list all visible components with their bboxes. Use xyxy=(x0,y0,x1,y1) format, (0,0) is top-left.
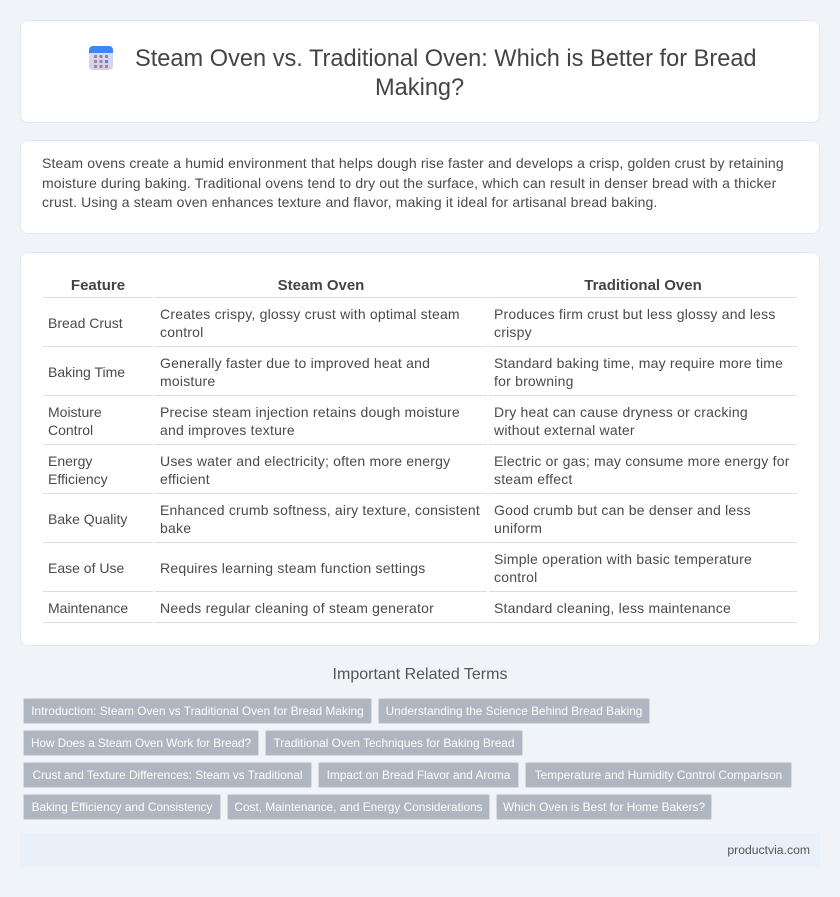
row: moisture control: without external water xyxy=(494,422,635,438)
title text: Making? xyxy=(375,75,464,101)
row: energy efficiency: Electric or gas; may consume more energy for xyxy=(494,453,790,469)
row: bake quality: Enhanced crumb softness, airy texture, consistent xyxy=(160,502,480,518)
table header: Feature xyxy=(71,277,125,294)
row: moisture control: and improves texture xyxy=(160,422,295,438)
row: bake quality: bake xyxy=(160,520,191,536)
row: ease of use: control xyxy=(494,569,538,585)
row: ease of use xyxy=(48,551,752,585)
row: energy efficiency: Energy xyxy=(48,453,92,469)
tag list: related terms: Impact on Bread Flavor and Aroma xyxy=(327,768,510,782)
panel: comparison table xyxy=(20,252,820,646)
row: moisture control: Control xyxy=(48,422,93,438)
tag list: related terms xyxy=(23,698,792,820)
row: bread crust: Produces firm crust but less glossy and less xyxy=(494,306,776,322)
row: moisture control xyxy=(48,404,748,438)
table header xyxy=(71,277,702,294)
row: bake quality: Good crumb but can be denser and less xyxy=(494,502,751,518)
row: moisture control: Moisture xyxy=(48,404,102,420)
row: baking time: Standard baking time, may require more time xyxy=(494,355,783,371)
footer bar xyxy=(20,833,820,867)
heading: important related terms: Important Related Terms xyxy=(333,666,507,683)
row: maintenance: Maintenance xyxy=(48,600,128,616)
title text: Steam Oven vs. Traditional Oven: Which is Better for Bread xyxy=(135,46,757,72)
tag list: related terms: Baking Efficiency and Consistency xyxy=(32,800,212,814)
row: maintenance: Standard cleaning, less maintenance xyxy=(494,600,731,616)
row: moisture control: Dry heat can cause dryness or cracking xyxy=(494,404,748,420)
panel: title xyxy=(20,20,820,123)
tag list: related terms: Cost, Maintenance, and Energy Considerations xyxy=(234,800,483,814)
icon: calendar grid xyxy=(89,46,113,70)
paragraph text: crust. Using a steam oven enhances texture and flavor, making it ideal for artisanal bread baking. xyxy=(42,194,657,210)
paragraph text: Steam ovens create a humid environment that helps dough rise faster and develops a crisp, golden crust by retaining xyxy=(42,155,784,171)
paragraph text xyxy=(42,155,784,210)
footer source text: productvia.com xyxy=(727,843,810,857)
tag list: related terms: Traditional Oven Techniques for Baking Bread xyxy=(274,736,514,750)
tag list: related terms: Which Oven is Best for Home Bakers? xyxy=(503,800,705,814)
row: bread crust: crispy xyxy=(494,324,532,340)
title text xyxy=(135,46,757,101)
panel: introduction paragraph xyxy=(20,140,820,234)
row: bake quality: Bake Quality xyxy=(48,511,127,527)
row: maintenance xyxy=(48,600,731,616)
row: bread crust: control xyxy=(160,324,204,340)
tag list: related terms: Introduction: Steam Oven vs Traditional Oven for Bread Making xyxy=(31,704,364,718)
row: energy efficiency: Uses water and electricity; often more energy xyxy=(160,453,450,469)
row: energy efficiency xyxy=(48,453,790,487)
table header: Traditional Oven xyxy=(584,277,702,294)
row: bread crust: Bread Crust xyxy=(48,315,123,331)
row: ease of use: Ease of Use xyxy=(48,560,124,576)
row: bake quality xyxy=(48,502,751,536)
tag list: related terms: Crust and Texture Differences: Steam vs Traditional xyxy=(32,768,303,782)
tag list: related terms: Temperature and Humidity Control Comparison xyxy=(535,768,782,782)
row: moisture control: Precise steam injection retains dough moisture xyxy=(160,404,460,420)
row: energy efficiency: Efficiency xyxy=(48,471,108,487)
row: energy efficiency: efficient xyxy=(160,471,210,487)
tag list: related terms: How Does a Steam Oven Work for Bread? xyxy=(31,736,251,750)
row: baking time: moisture xyxy=(160,373,215,389)
row: baking time: Baking Time xyxy=(48,364,125,380)
paragraph text: moisture during baking. Traditional ovens tend to dry out the surface, which can result in denser bread with a thicker xyxy=(42,175,776,191)
row: energy efficiency: steam effect xyxy=(494,471,573,487)
table header: Steam Oven xyxy=(278,277,364,294)
row: bread crust xyxy=(48,306,776,340)
row: baking time: Generally faster due to improved heat and xyxy=(160,355,430,371)
row: ease of use: Requires learning steam function settings xyxy=(160,560,425,576)
tag list: related terms: Understanding the Science Behind Bread Baking xyxy=(386,704,642,718)
row: baking time xyxy=(48,355,783,389)
row: bake quality: uniform xyxy=(494,520,542,536)
row: baking time: for browning xyxy=(494,373,574,389)
row: bread crust: Creates crispy, glossy crust with optimal steam xyxy=(160,306,460,322)
row: maintenance: Needs regular cleaning of steam generator xyxy=(160,600,434,616)
row: ease of use: Simple operation with basic temperature xyxy=(494,551,752,567)
